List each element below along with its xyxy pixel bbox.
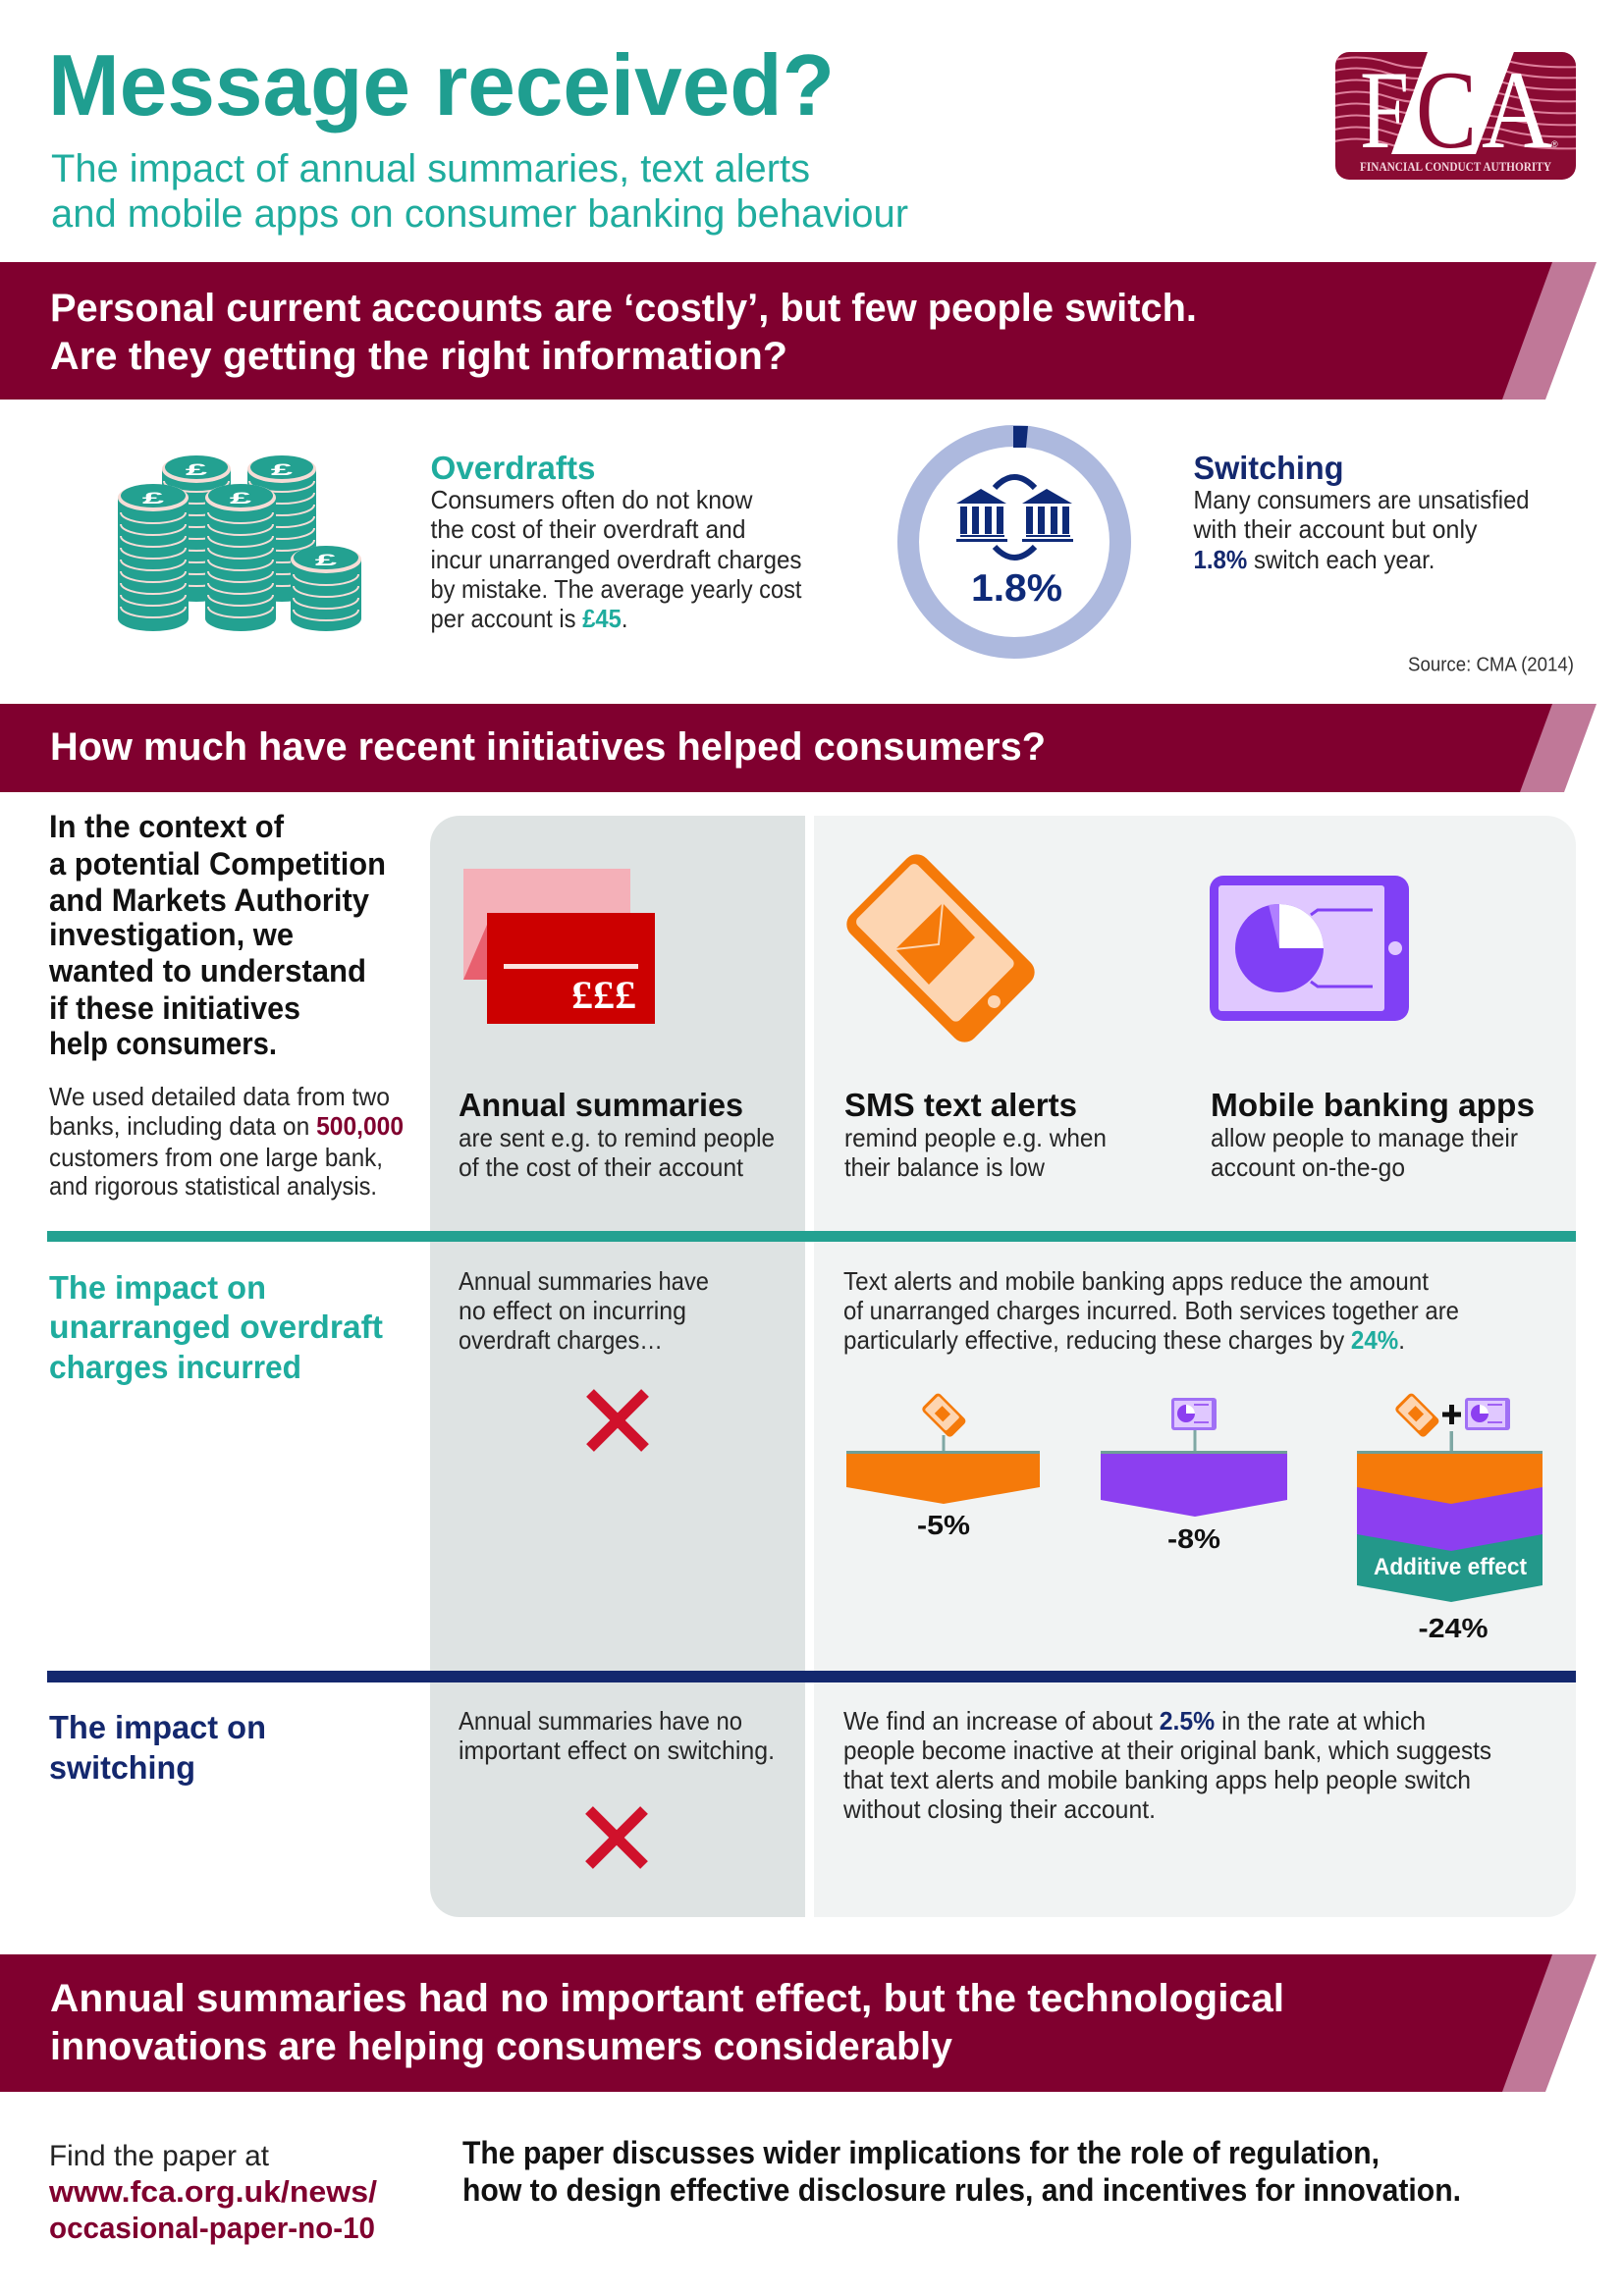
subtitle [51,147,908,236]
text: method: customers from one large bank, [49,1143,383,1172]
banner: costly accounts [0,262,1597,400]
text: switching: Many consumers are unsatisfied [1194,485,1530,514]
icon: coin stacks: £ [271,460,293,479]
text: find the paper: www.fca.org.uk/news/ [48,2174,377,2209]
heading: impact on switching [49,1709,266,1786]
text: find the paper: Find the paper at [49,2140,270,2172]
text: overdrafts: incur unarranged overdraft charges [430,545,801,574]
text: annual summaries switching finding: important effect on switching. [459,1735,775,1765]
icon: tablet with pie chart [1210,876,1409,1021]
text: wider implications [462,2135,1461,2208]
chart: mobile apps effect: -8% [1167,1523,1220,1554]
logo: FCA [1330,49,1586,180]
text: technology overdraft finding: particularly effective, reducing these charges by 24%. [843,1325,1405,1355]
text: method [49,1082,404,1201]
text: technology overdraft finding [843,1266,1459,1355]
icon: bank buildings with switching arrows [956,477,1073,558]
text: method: and rigorous statistical analysis. [49,1171,377,1201]
text: annual summaries: are sent e.g. to remind people [459,1123,775,1152]
text: overdrafts: Overdrafts [430,450,595,486]
text: context: and Markets Authority [49,882,369,918]
icon: coin stacks [118,455,361,631]
banner: recent initiatives [0,704,1597,792]
banner: recent initiatives: How much have recent initiatives helped consumers? [50,725,1046,769]
panel: annual summaries column [430,816,805,1917]
text: wider implications: how to design effective disclosure rules, and incentives for innovation. [462,2172,1461,2208]
text: annual summaries: Annual summaries [459,1087,743,1123]
text: SMS text alerts: their balance is low [844,1152,1045,1182]
text: method: banks, including data on 500,000 [49,1111,404,1141]
icon: red cross overdraft [590,1393,645,1448]
text: annual summaries overdraft finding: overdraft charges… [459,1325,663,1355]
text: technology overdraft finding: Text alerts and mobile banking apps reduce the amount [843,1266,1430,1296]
banner: costly accounts: Personal current accounts are ‘costly’, but few people switch. [50,287,1197,330]
banner: costly accounts: Are they getting the right information? [50,335,787,378]
icon: coin stacks: £ [186,460,207,479]
logo: FCA: A [1482,49,1552,172]
text: mobile banking apps: account on-the-go [1211,1152,1405,1182]
heading: impact on overdraft charges: charges incurred [49,1349,301,1385]
title: Message received? [48,36,835,133]
logo: FCA: C [1416,49,1477,172]
icon: statement with pounds: £££ [571,973,636,1017]
text: annual summaries overdraft finding: Annual summaries have [459,1266,709,1296]
chart: combined additive effect: Additive effect [1374,1554,1527,1580]
text: find the paper: occasional-paper-no-10 [49,2211,375,2245]
subtitle: and mobile apps on consumer banking behaviour [51,192,908,236]
text: technology overdraft finding: of unarranged charges incurred. Both services together are [843,1296,1459,1325]
text: overdrafts: Consumers often do not know [430,485,753,514]
text: method: We used detailed data from two [49,1082,390,1111]
banner: conclusion [0,1954,1597,2092]
panel: technology columns [814,816,1576,1917]
logo: FCA: F [1360,49,1409,172]
text: annual summaries switching finding [459,1706,775,1765]
chart: 1.8% donut [908,426,1120,648]
chart: 1.8% donut: 1.8% [971,567,1062,610]
text: find the paper [48,2140,377,2245]
text: technology switching finding: people become inactive at their original bank, which suggests [843,1735,1491,1765]
teal divider bar [47,1231,1576,1242]
text: switching: 1.8% switch each year. [1194,545,1435,574]
heading: impact on switching: switching [49,1749,195,1786]
chart: combined additive effect: -24% [1418,1613,1489,1643]
icon: phone with envelope [841,849,1040,1047]
icon: coin stacks: £ [142,489,164,507]
text: overdrafts: the cost of their overdraft and [430,514,746,544]
text: annual summaries [459,1087,775,1182]
logo: FCA: ® [1551,139,1558,149]
text: technology switching finding: that text alerts and mobile banking apps help people switch [843,1765,1471,1794]
text: SMS text alerts [844,1087,1107,1182]
text: technology switching finding: We find an increase of about 2.5% in the rate at which [843,1706,1426,1735]
banner: conclusion: innovations are helping consumers considerably [50,2025,953,2068]
text: annual summaries: of the cost of their account [459,1152,744,1182]
chart: combined additive effect [1357,1392,1543,1643]
text: SMS text alerts: SMS text alerts [844,1087,1077,1123]
banner: conclusion: Annual summaries had no important effect, but the technological [50,1977,1284,2020]
text: context: In the context of [49,809,284,844]
logo: FCA: FINANCIAL CONDUCT AUTHORITY [1360,159,1552,174]
text: mobile banking apps: Mobile banking apps [1211,1087,1535,1123]
text: SMS text alerts: remind people e.g. when [844,1123,1107,1152]
text: mobile banking apps [1211,1087,1535,1182]
text: context: investigation, we [49,917,294,952]
text: wider implications: The paper discusses wider implications for the role of regulation, [462,2135,1380,2170]
source note: Source: CMA (2014) [1408,654,1574,675]
heading: impact on overdraft charges: unarranged overdraft [49,1308,383,1345]
text: context: help consumers. [49,1026,277,1061]
icon: coin stacks: £ [315,551,337,569]
text: context: if these initiatives [49,990,300,1026]
text: switching: Switching [1194,450,1343,486]
text: annual summaries overdraft finding [459,1266,709,1355]
text: context: wanted to understand [48,953,366,988]
icon: small phone [921,1392,967,1438]
chart: mobile apps effect [1101,1398,1287,1554]
text: annual summaries overdraft finding: no effect on incurring [459,1296,686,1325]
text: mobile banking apps: allow people to manage their [1211,1123,1518,1152]
navy divider bar [47,1671,1576,1682]
text: overdrafts: by mistake. The average yearly cost [430,574,802,604]
chart: SMS alerts effect: -5% [917,1510,970,1540]
subtitle: The impact of annual summaries, text alerts [51,147,810,190]
icon: coin stacks: £ [230,489,251,507]
icon: statement with pounds [463,869,655,1024]
text: context [48,809,386,1061]
icon: red cross switching [589,1810,644,1865]
icon: small phone plus tablet [1394,1392,1510,1438]
heading: impact on overdraft charges: The impact on [49,1269,266,1306]
chart: SMS alerts effect [846,1392,1040,1540]
icon: small tablet [1171,1398,1217,1430]
heading: impact on switching: The impact on [49,1709,266,1745]
text: technology switching finding [842,1706,1491,1824]
heading: impact on overdraft charges [49,1269,383,1385]
text: overdrafts: per account is £45. [430,604,628,633]
text: annual summaries switching finding: Annual summaries have no [459,1706,742,1735]
text: switching: with their account but only [1193,514,1477,544]
text: overdrafts [430,450,802,633]
text: switching [1193,450,1530,574]
text: context: a potential Competition [49,846,386,881]
text: technology switching finding: without closing their account. [842,1794,1156,1824]
